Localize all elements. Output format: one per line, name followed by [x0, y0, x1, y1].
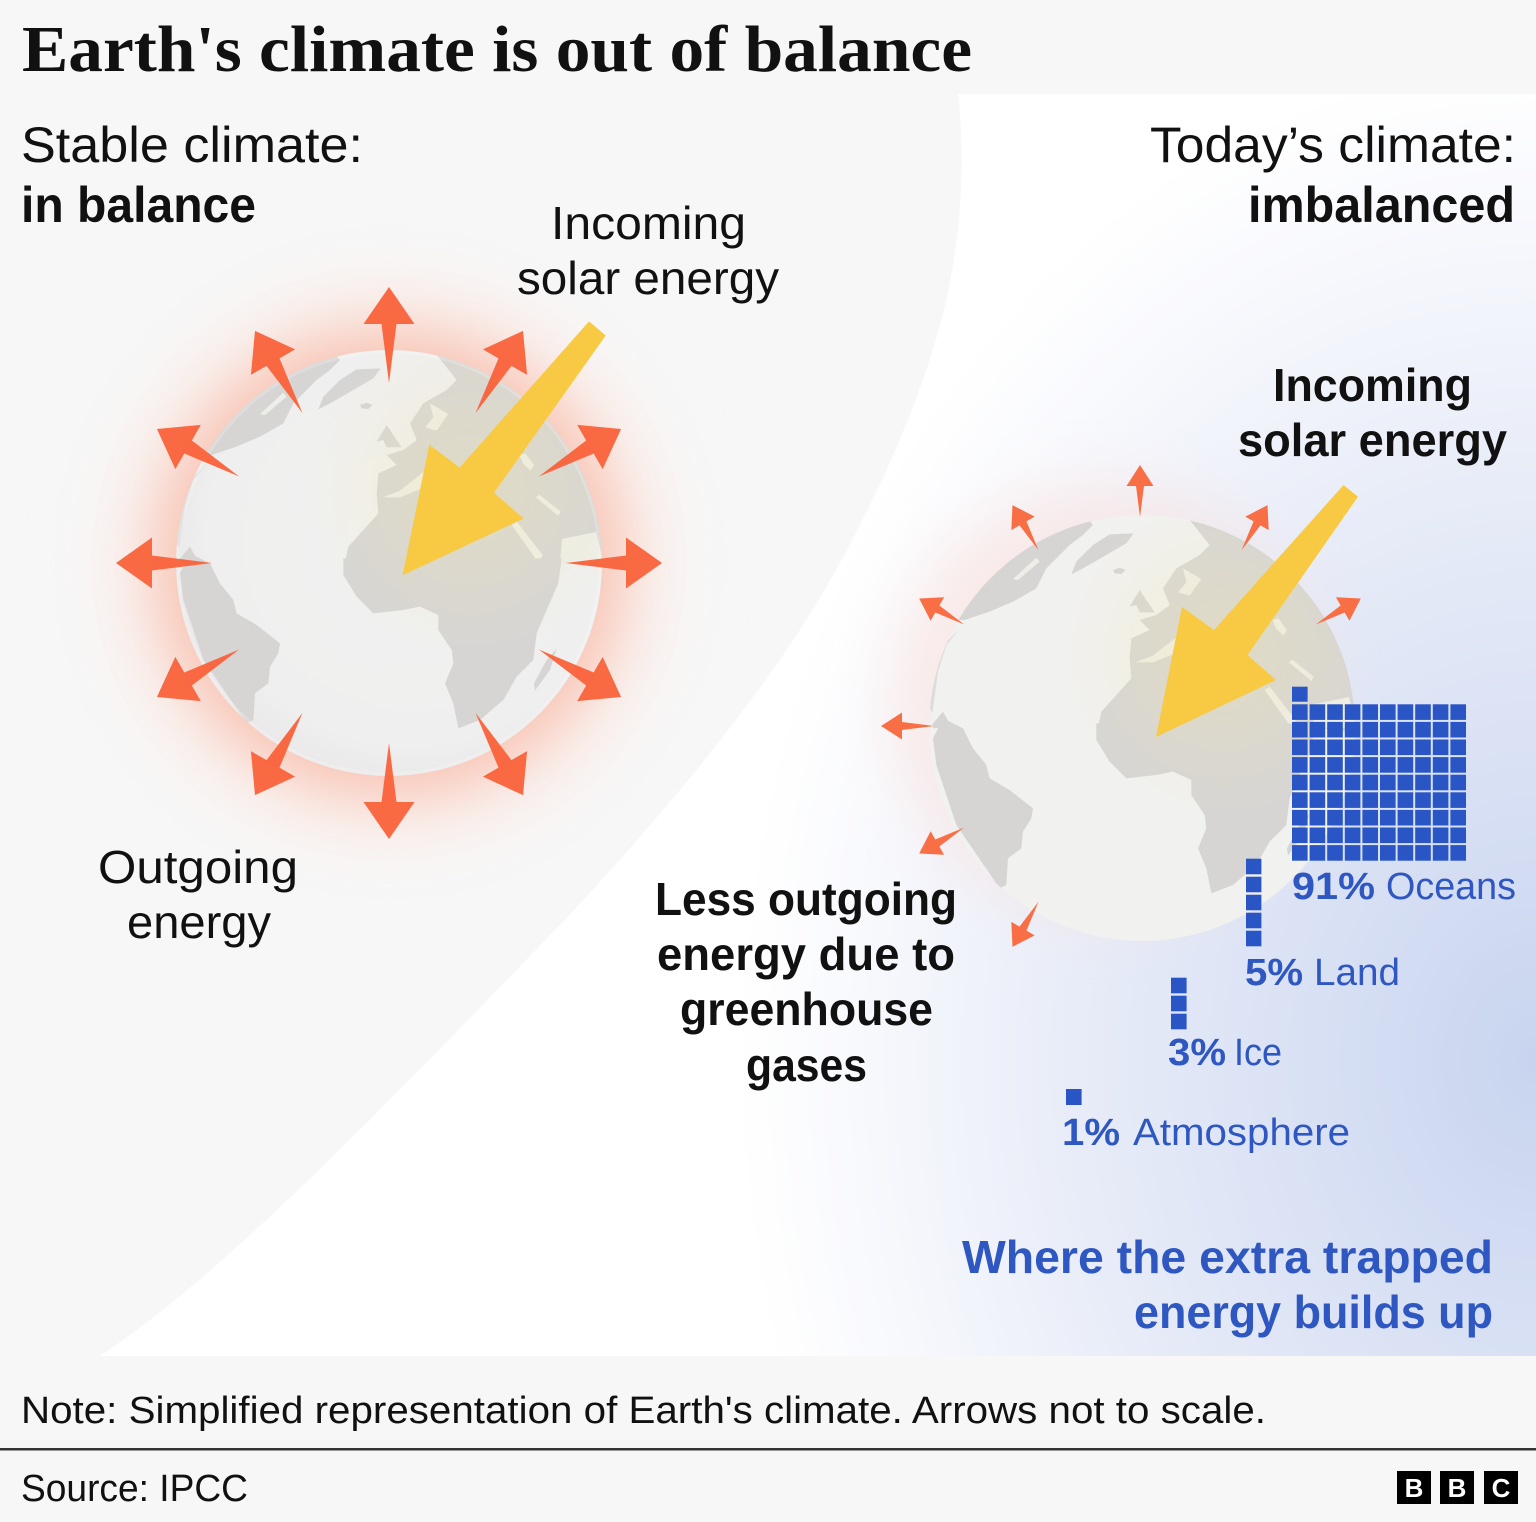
label: 5% land: Land	[1314, 952, 1400, 994]
label: incoming solar energy, today: solar energy	[1238, 414, 1507, 466]
label: 91% oceans	[1292, 866, 1516, 908]
waffle: atmosphere 1%	[1066, 1089, 1082, 1105]
panel: stable climate background	[0, 94, 962, 1356]
waffle: land 5%	[1246, 859, 1261, 946]
label: 3% ice: Ice	[1234, 1032, 1282, 1074]
label: less outgoing energy: Less outgoing	[655, 873, 957, 925]
callout: where the extra trapped energy builds up	[962, 1231, 1493, 1338]
glow: right globe faint heat	[883, 480, 1252, 896]
label: incoming solar energy, today	[1238, 359, 1507, 466]
heading: today's climate: imbalanced	[1248, 177, 1515, 233]
logo: BBC: B	[1405, 1473, 1423, 1503]
label: 1% atmosphere: Atmosphere	[1133, 1112, 1350, 1154]
callout: where the extra trapped energy builds up: Where the extra trapped	[962, 1231, 1493, 1283]
label: less outgoing energy: greenhouse	[680, 983, 933, 1035]
globe: today's climate	[928, 508, 1376, 941]
label: less outgoing energy	[655, 873, 957, 1091]
label: less outgoing energy: gases	[746, 1039, 867, 1091]
heading: today's climate: Today’s climate:	[1150, 117, 1516, 173]
heading: stable climate	[21, 117, 363, 233]
arrow: incoming solar energy, stable climate	[403, 321, 606, 575]
title: Earth's climate is out of balance	[22, 13, 972, 86]
heading: stable climate: Stable climate:	[21, 117, 363, 173]
label: outgoing energy: Outgoing	[98, 841, 298, 893]
arrows: outgoing energy, stable climate	[116, 287, 662, 839]
logo: BBC: C	[1492, 1473, 1511, 1503]
waffle: ice 3%	[1171, 978, 1187, 1029]
label: 1% atmosphere: 1%	[1062, 1112, 1120, 1154]
label: 91% oceans: Oceans	[1386, 866, 1516, 908]
label: 5% land: 5%	[1245, 952, 1303, 994]
label: incoming solar energy, stable: Incoming	[551, 197, 746, 249]
source: Source: IPCC	[21, 1468, 248, 1510]
label: incoming solar energy, today: Incoming	[1273, 359, 1472, 411]
waffle: oceans 91%	[1292, 687, 1466, 861]
logo: BBC: B	[1448, 1473, 1466, 1503]
label: incoming solar energy, stable: solar energy	[517, 252, 779, 304]
label: incoming solar energy, stable	[517, 197, 779, 304]
arrows: outgoing energy, today's climate	[881, 465, 1368, 954]
label: outgoing energy	[98, 841, 298, 948]
globe: stable climate	[175, 343, 623, 776]
label: outgoing energy: energy	[127, 896, 271, 948]
label: less outgoing energy: energy due to	[657, 928, 955, 980]
label: 3% ice: 3%	[1168, 1032, 1226, 1074]
label: 3% ice	[1168, 1032, 1282, 1074]
arrow: incoming solar energy, today's climate	[1156, 485, 1358, 737]
heading: stable climate: in balance	[21, 177, 256, 233]
callout: where the extra trapped energy builds up: energy builds up	[1134, 1286, 1493, 1338]
logo: BBC	[1397, 1471, 1518, 1504]
glow: left globe outer heat	[124, 298, 654, 828]
label: 5% land	[1245, 952, 1400, 994]
heading: today's climate	[1150, 117, 1516, 233]
label: 91% oceans: 91%	[1292, 866, 1375, 908]
note: Note: Simplified representation of Earth's climate. Arrows not to scale.	[21, 1390, 1266, 1432]
